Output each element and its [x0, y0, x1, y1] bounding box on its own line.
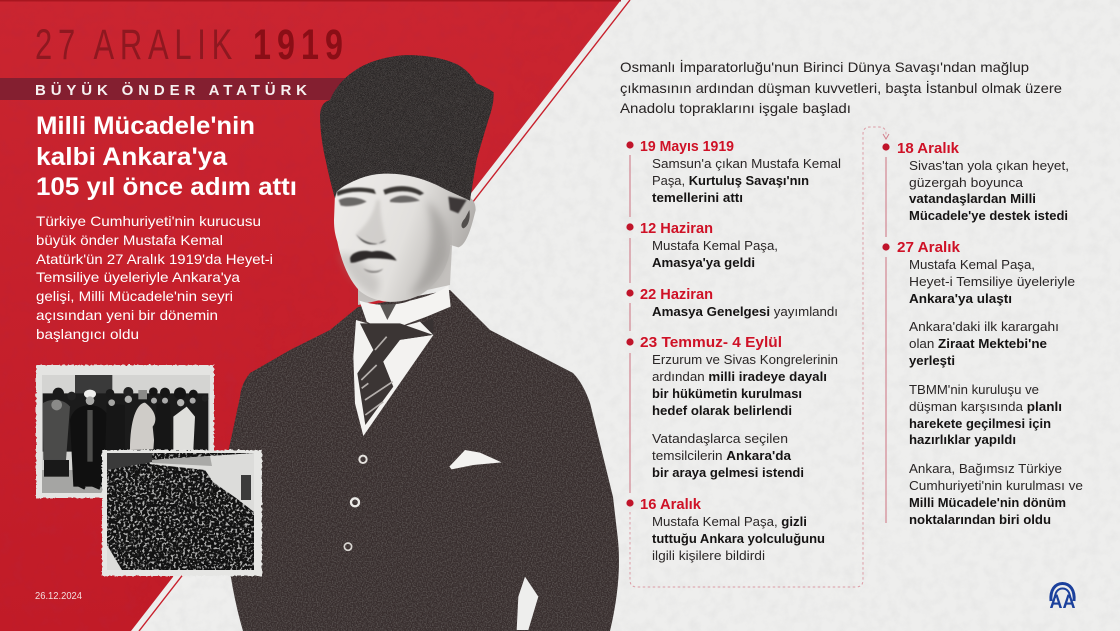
event: 27 Aralık: hazırlıklar yapıldı	[909, 432, 1016, 447]
event: 16 Aralık	[626, 497, 825, 563]
event: 27 Aralık: Milli Mücadele'nin dönüm	[909, 495, 1066, 510]
buttons	[359, 456, 367, 463]
icon: AA logo	[1050, 584, 1076, 613]
event: 27 Aralık: noktalarından biri oldu	[909, 512, 1051, 527]
event: 18 Aralık	[882, 141, 1069, 237]
event: 16 Aralık: 16 Aralık	[640, 497, 702, 513]
intro paragraph: gelişi, Milli Mücadele'nin seyri	[36, 288, 233, 304]
date: 26.12.2024	[35, 590, 82, 602]
suit	[226, 290, 619, 631]
heading: Milli Mücadele'nin	[36, 112, 255, 140]
shirt and tie	[344, 320, 538, 630]
arm gap	[517, 577, 538, 630]
intro paragraph: başlangıcı oldu	[36, 326, 139, 342]
event: 27 Aralık: 27 Aralık	[897, 240, 961, 256]
event: 18 Aralık: vatandaşlardan Milli	[909, 191, 1036, 206]
event: 27 Aralık	[882, 240, 1083, 527]
event: 22 Haziran	[626, 287, 838, 331]
photo: group with clergy	[36, 365, 214, 498]
head	[320, 55, 494, 350]
event: 23 Temmuz - 4 Eylül: 23 Temmuz- 4 Eylül	[640, 335, 782, 351]
portrait of Atatürk	[226, 55, 619, 631]
event: 23 Temmuz - 4 Eylül: hedef olarak belirlendi	[652, 403, 792, 418]
event: 23 Temmuz - 4 Eylül	[626, 335, 838, 493]
timeline right column	[882, 141, 1083, 527]
event: 12 Haziran	[626, 221, 778, 283]
event: 27 Aralık: Mustafa Kemal Paşa,	[909, 257, 1035, 272]
event: 16 Aralık: Mustafa Kemal Paşa, gizli	[652, 514, 807, 529]
intro paragraph: büyük önder Mustafa Kemal	[36, 232, 223, 248]
event: 27 Aralık: Ankara'ya ulaştı	[909, 291, 1012, 306]
event: 23 Temmuz - 4 Eylül: bir hükümetin kurulması	[652, 386, 802, 401]
brows and eyes	[337, 187, 376, 196]
event: 18 Aralık: Sivas'tan yola çıkan heyet,	[909, 158, 1069, 173]
event: 12 Haziran: Mustafa Kemal Paşa,	[652, 238, 778, 253]
event: 27 Aralık: harekete geçilmesi için	[909, 416, 1051, 431]
event: 22 Haziran: 22 Haziran	[640, 287, 713, 303]
event: 23 Temmuz - 4 Eylül: temsilcilerin Ankara'da	[652, 448, 792, 463]
subtitle band: BÜYÜK ÖNDER ATATÜRK	[35, 82, 307, 99]
pocket square	[449, 450, 502, 469]
event: 18 Aralık: 18 Aralık	[897, 141, 960, 157]
event: 16 Aralık: tuttuğu Ankara yolculuğunu	[652, 531, 825, 546]
event: 12 Haziran: Amasya'ya geldi	[652, 255, 755, 270]
event: 27 Aralık: olan Ziraat Mektebi'ne	[909, 336, 1047, 351]
title: 27 ARALIK	[35, 20, 232, 68]
panel: red diagonal	[0, 0, 630, 631]
timeline connector dashed	[630, 127, 889, 587]
neck	[358, 245, 452, 305]
intro paragraph: açısından yeni bir dönemin	[36, 307, 218, 323]
intro paragraph	[36, 213, 273, 342]
heading	[36, 112, 297, 201]
event: 27 Aralık: Ankara'daki ilk karargahı	[909, 319, 1059, 334]
event: 27 Aralık: Cumhuriyeti'nin kurulması ve	[909, 478, 1083, 493]
ear	[462, 210, 470, 228]
event: 27 Aralık: yerleşti	[909, 353, 955, 368]
heading: 105 yıl önce adım attı	[36, 173, 297, 201]
collar	[359, 285, 451, 333]
bow tie	[360, 318, 433, 350]
event: 23 Temmuz - 4 Eylül: ardından milli iradeye dayalı	[652, 369, 827, 384]
event: 19 Mayıs 1919: 19 Mayıs 1919	[640, 139, 734, 155]
subtitle band	[0, 78, 352, 100]
event: 19 Mayıs 1919: Paşa, Kurtuluş Savaşı'nın	[652, 173, 809, 188]
event: 23 Temmuz - 4 Eylül: bir araya gelmesi istendi	[652, 465, 804, 480]
event: 27 Aralık: Heyet-i Temsiliye üyeleriyle	[909, 274, 1075, 289]
event: 27 Aralık: TBMM'nin kuruluşu ve	[909, 382, 1039, 397]
title: 1919	[253, 22, 343, 69]
title	[35, 20, 343, 69]
event: 19 Mayıs 1919: temellerini attı	[652, 190, 743, 205]
event: 27 Aralık: düşman karşısında planlı	[909, 399, 1062, 414]
hat	[320, 55, 494, 201]
event: 23 Temmuz - 4 Eylül: Vatandaşlarca seçilen	[652, 431, 788, 446]
right intro text	[620, 58, 1062, 116]
event: 22 Haziran: Amasya Genelgesi yayımlandı	[652, 304, 838, 319]
intro paragraph: Atatürk'ün 27 Aralık 1919'da Heyet-i	[36, 251, 273, 267]
event: 18 Aralık: güzergah boyunca	[909, 175, 1024, 190]
moustache	[350, 251, 397, 263]
right intro text: çıkmasının ardından düşman kuvvetleri, başta İstanbul olmak üzere	[620, 79, 1062, 96]
right intro text: Anadolu topraklarını işgale başladı	[620, 100, 851, 116]
nose shadow	[356, 200, 386, 244]
event: 23 Temmuz - 4 Eylül: Erzurum ve Sivas Kongrelerinin	[652, 352, 838, 367]
icon: AA logo: AA	[1050, 592, 1076, 613]
intro paragraph: Türkiye Cumhuriyeti'nin kurucusu	[36, 213, 261, 229]
event: 16 Aralık: ilgili kişilere bildirdi	[652, 548, 765, 563]
event: 19 Mayıs 1919	[626, 139, 841, 217]
photo: crowd	[102, 450, 262, 576]
event: 27 Aralık: Ankara, Bağımsız Türkiye	[909, 461, 1062, 476]
event: 19 Mayıs 1919: Samsun'a çıkan Mustafa Kemal	[652, 156, 841, 171]
event: 18 Aralık: Mücadele'ye destek istedi	[909, 208, 1068, 223]
right intro text: Osmanlı İmparatorluğu'nun Birinci Dünya Savaşı'ndan mağlup	[620, 58, 1029, 75]
heading: kalbi Ankara'ya	[36, 143, 228, 171]
intro paragraph: Temsiliye üyeleriyle Ankara'ya	[36, 269, 240, 285]
timeline left column	[626, 139, 841, 563]
event: 12 Haziran: 12 Haziran	[640, 221, 713, 237]
